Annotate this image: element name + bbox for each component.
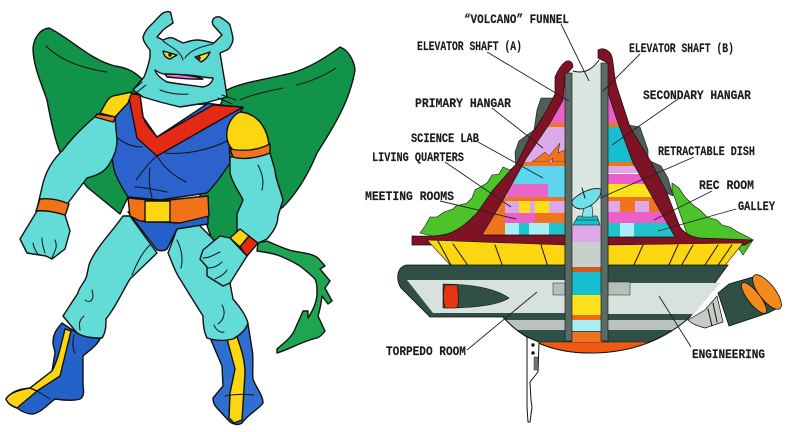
collar (128, 93, 243, 156)
hull lower compartments (500, 320, 688, 353)
head with horns (133, 12, 233, 107)
deck struts (438, 241, 732, 268)
panel: caped hero character (6, 12, 355, 424)
artwork of the base (398, 24, 786, 422)
labels: ELEVATOR SHAFT (A) (417, 41, 522, 54)
labels: SCIENCE LAB (411, 132, 479, 146)
right arm and wristband (230, 153, 283, 256)
belt (128, 196, 209, 223)
cape (33, 28, 355, 240)
engine rooms (407, 280, 720, 314)
elevator shafts (565, 63, 608, 341)
torpedo (443, 284, 509, 308)
left boot (6, 323, 100, 414)
labels: “VOLCANO” FUNNEL (464, 12, 569, 27)
crimson volcano wall (412, 49, 753, 245)
trunks (128, 208, 208, 251)
torso (112, 93, 243, 200)
labels: SECONDARY HANGAR (643, 88, 752, 103)
retractable dish (572, 188, 601, 225)
labels: TORPEDO ROOM (386, 344, 466, 359)
right rooms (608, 94, 674, 237)
funnel rim (573, 60, 599, 72)
engine nozzle (688, 271, 786, 328)
central shaft compartments (572, 225, 602, 342)
labels: PRIMARY HANGAR (415, 97, 512, 111)
yellow mid deck (427, 240, 743, 268)
left rooms (482, 81, 565, 235)
labels: ENGINEERING (692, 347, 765, 362)
gray rock (515, 98, 673, 196)
panel: base cross-section diagram (365, 12, 786, 422)
funnel (572, 62, 601, 226)
right shoulder (227, 112, 270, 158)
labels: RETRACTABLE DISH (658, 146, 755, 159)
neck spines (133, 82, 236, 104)
labels (365, 12, 775, 362)
labels: ELEVATOR SHAFT (B) (629, 43, 734, 56)
labels: REC ROOM (699, 179, 754, 193)
left shoulder (95, 92, 132, 122)
leg muscle lines (79, 240, 224, 332)
lower hull (398, 265, 728, 353)
eyes (163, 51, 210, 62)
right boot (211, 324, 263, 424)
tail (257, 241, 332, 353)
labels: MEETING ROOMS (365, 190, 454, 204)
antenna (527, 337, 539, 422)
labels: LIVING QUARTERS (372, 152, 464, 165)
left leg (63, 216, 157, 338)
labels: GALLEY (738, 200, 775, 214)
green foliage (420, 165, 753, 255)
left arm and fist (20, 115, 117, 259)
right leg (168, 223, 248, 340)
chest muscle lines (114, 135, 229, 198)
leader lines (440, 24, 736, 350)
right fist (200, 236, 247, 286)
mouth (155, 70, 213, 87)
